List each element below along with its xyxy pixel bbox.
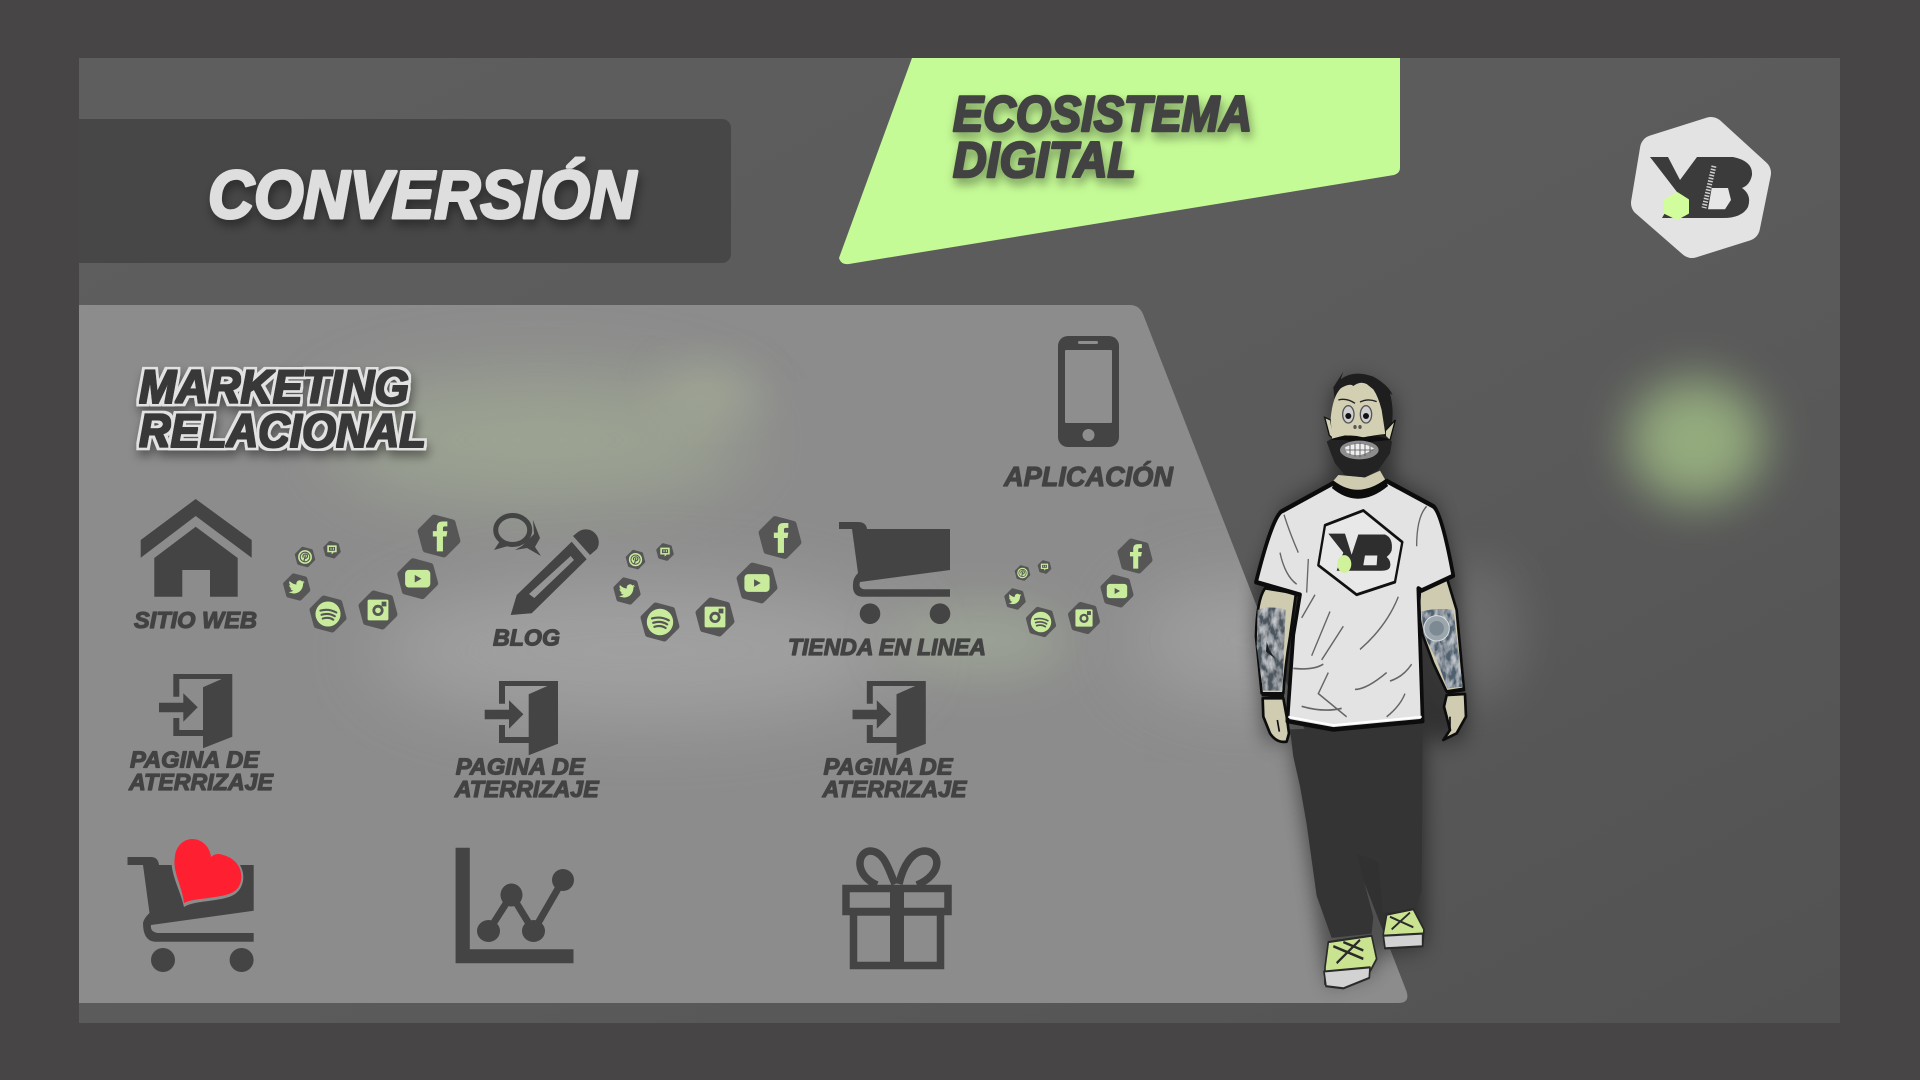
icon: blog pencil and speech bubbles — [494, 516, 599, 615]
heading: conversión: CONVERSIÓN — [208, 157, 638, 233]
landing page 1: PAGINA DE — [130, 746, 260, 772]
icon: phone — [1058, 336, 1119, 447]
icon: house — [141, 499, 252, 597]
icon: line chart — [456, 848, 574, 963]
head — [1325, 372, 1395, 494]
landing page 2: PAGINA DE — [456, 753, 585, 779]
logo: YB hexagon — [1645, 131, 1757, 244]
shirt — [1256, 481, 1453, 729]
panel: marketing relacional — [79, 305, 1520, 1003]
heading: marketing relacional: RELACIONAL — [139, 404, 426, 457]
social icons group 1 — [285, 518, 457, 629]
pants — [1290, 725, 1423, 938]
person illustration — [1253, 372, 1467, 988]
landing page 1: ATERRIZAJE — [128, 769, 274, 795]
landing page 3: ATERRIZAJE — [821, 776, 967, 802]
icon: gift — [846, 851, 948, 969]
heading: ecosistema digital: DIGITAL — [953, 132, 1136, 188]
label: blog: BLOG — [493, 625, 560, 651]
glow: right green blur — [1628, 379, 1764, 503]
landing page 2: ATERRIZAJE — [454, 776, 599, 802]
panel: conversión — [60, 119, 731, 263]
shoes — [1324, 909, 1424, 988]
label: tienda en linea: TIENDA EN LINEA — [788, 634, 986, 660]
icon: cart with heart — [128, 837, 254, 972]
heading: marketing relacional — [139, 360, 426, 457]
social icons group 3 — [1006, 541, 1150, 635]
landing page 3: PAGINA DE — [824, 753, 953, 779]
heading: marketing relacional: MARKETING — [139, 360, 409, 413]
landing page 2 — [454, 681, 599, 802]
label: sitio web: SITIO WEB — [134, 607, 257, 633]
heading: ecosistema digital — [953, 86, 1252, 188]
social icons group 2 — [616, 520, 798, 638]
icon: shopping cart — [839, 522, 950, 624]
tattooed arms and hands — [1256, 579, 1466, 742]
landing page 1 — [128, 674, 274, 795]
landing page 3 — [821, 681, 967, 802]
banner: ecosistema digital — [839, 58, 1400, 264]
heading: ecosistema digital: ECOSISTEMA — [953, 86, 1252, 142]
label: aplicación: APLICACIÓN — [1003, 461, 1174, 492]
